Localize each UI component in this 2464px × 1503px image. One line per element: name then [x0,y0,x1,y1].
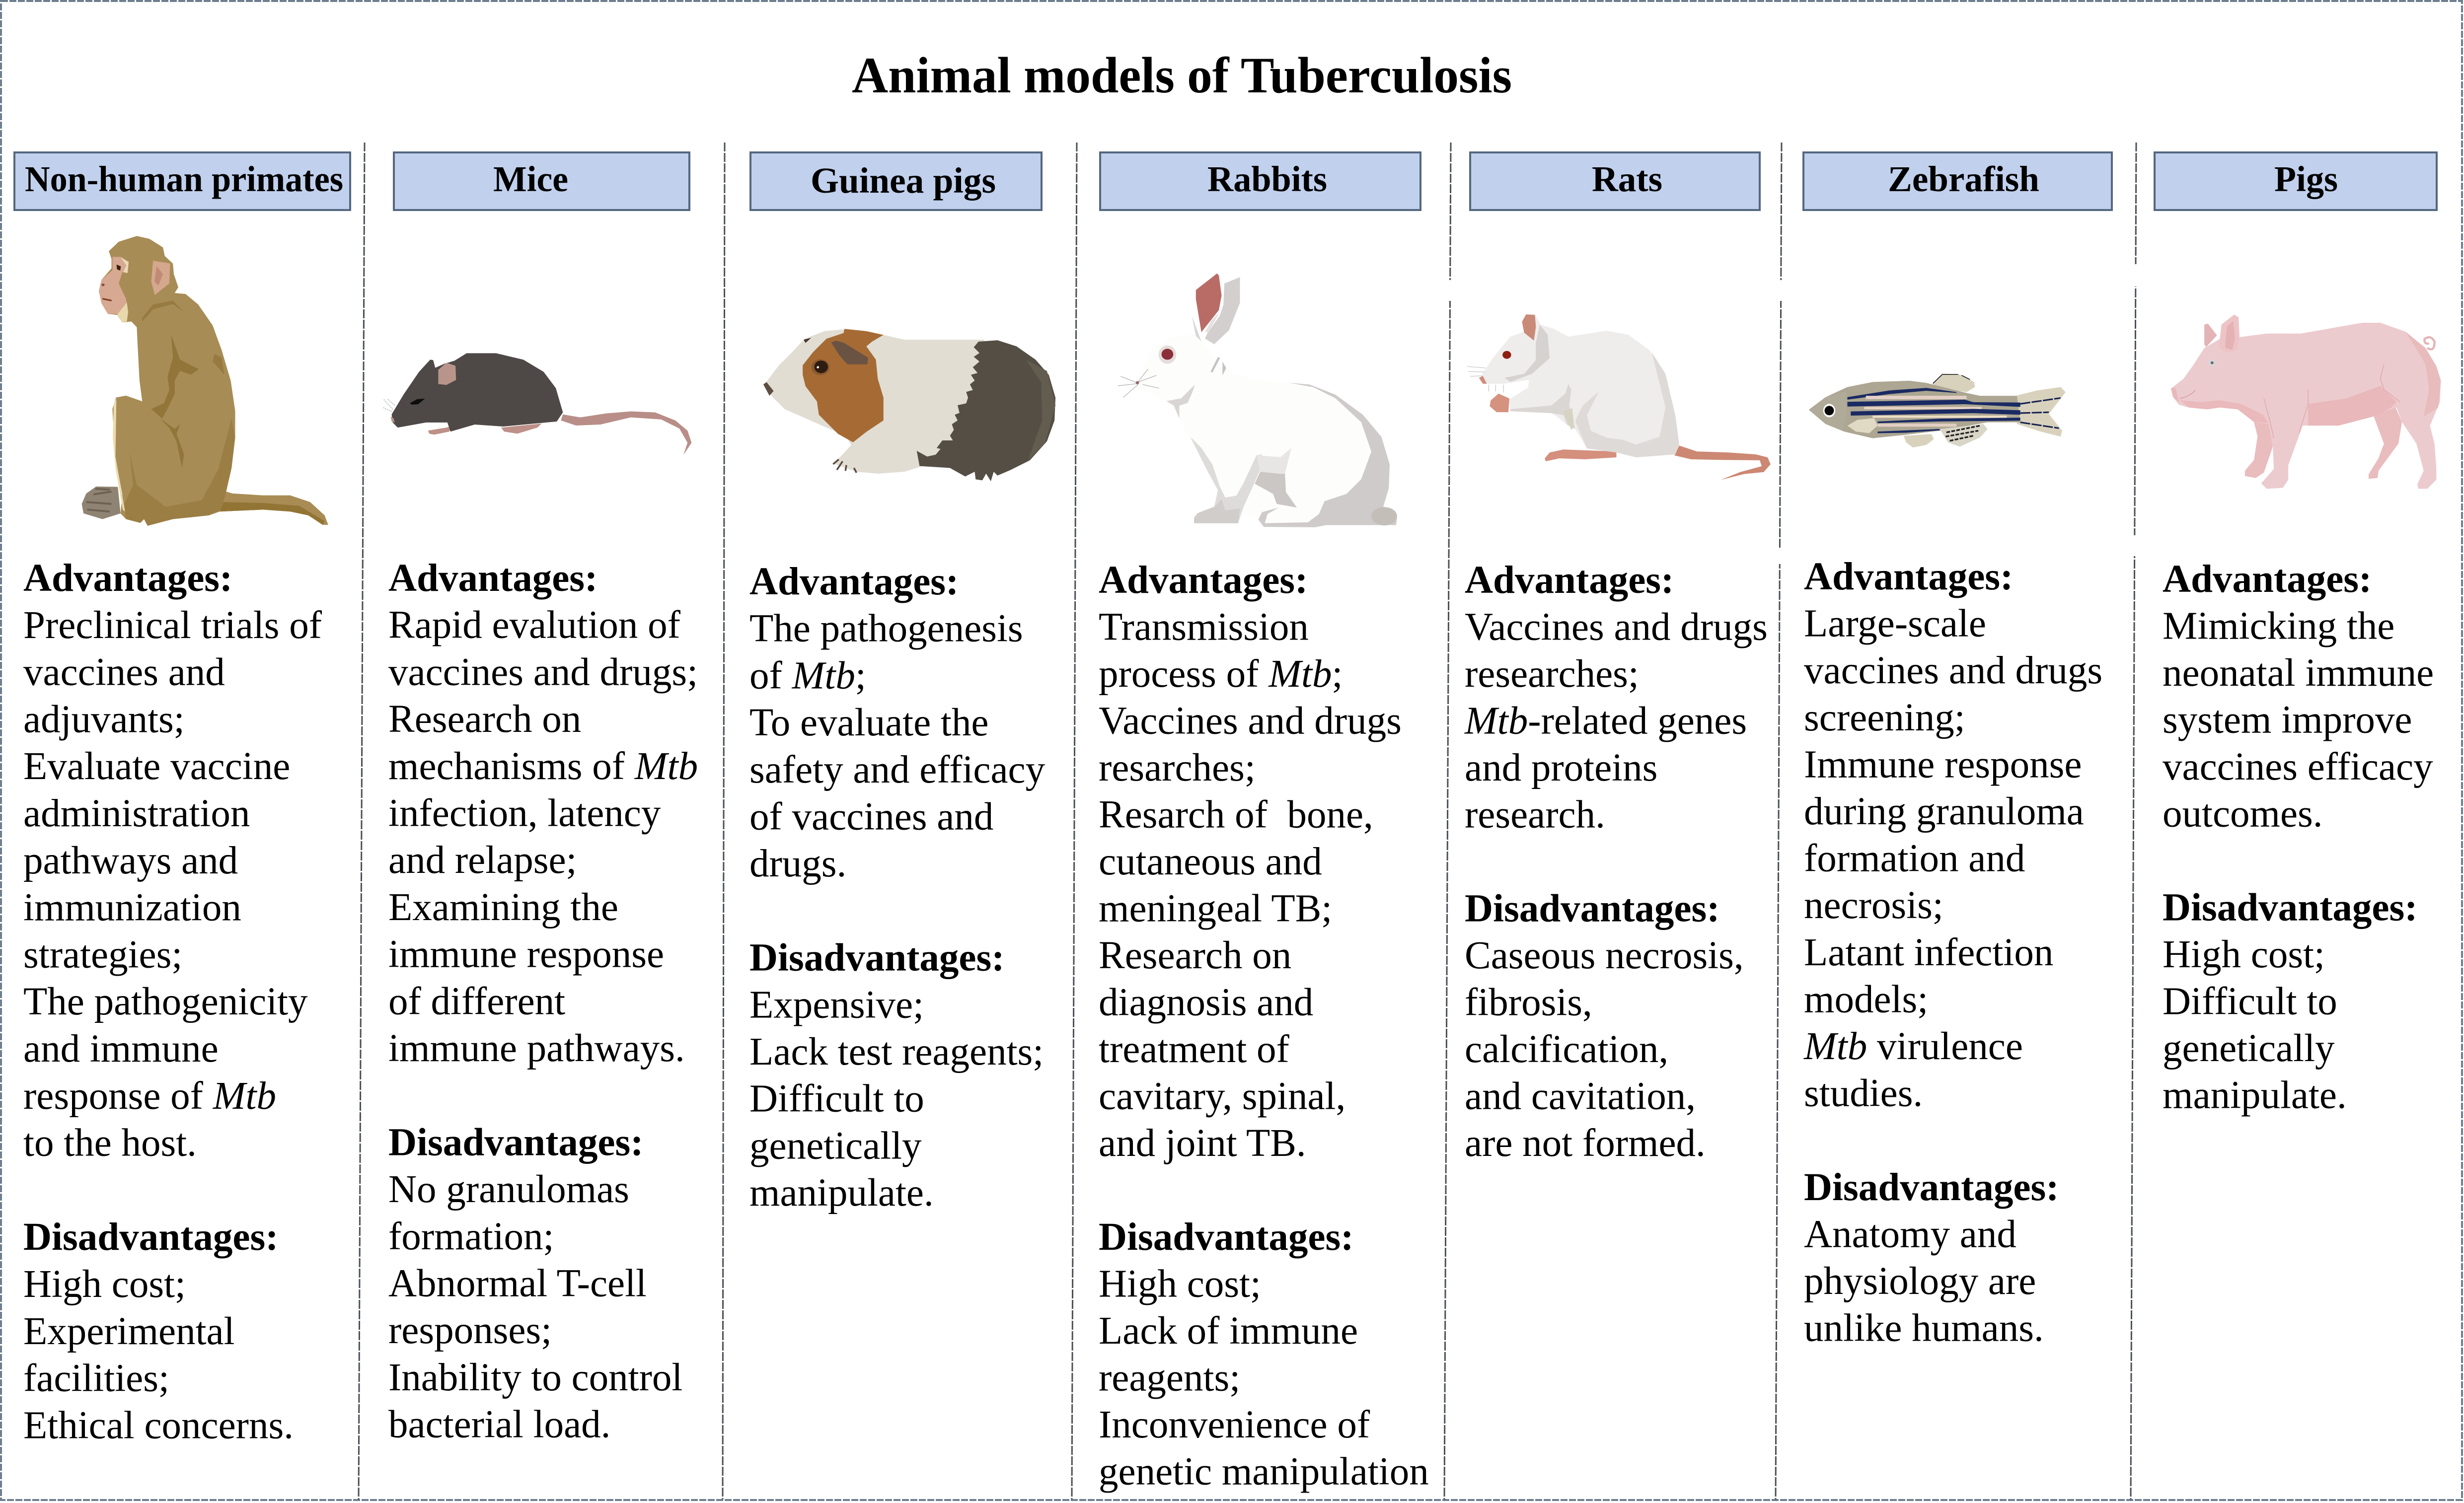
text: advantages and disadvantages: screening; [1804,696,1965,739]
text: advantages and disadvantages: cutaneous and [1099,840,1322,883]
text: advantages and disadvantages: process of Mtb; [1099,652,1343,696]
text: advantages and disadvantages: To evaluate the [749,701,988,744]
panel: Rabbits [1099,152,1429,1494]
text: advantages and disadvantages: unlike humans. [1804,1307,2044,1350]
text: advantages and disadvantages: vaccines efficacy [2163,745,2433,788]
text: advantages and disadvantages: Disadvantages: [1804,1166,2059,1209]
text: advantages and disadvantages: manipulate. [749,1171,934,1215]
text: advantages and disadvantages: resarches; [1099,746,1256,789]
text: advantages and disadvantages: and immune [23,1027,219,1071]
text: advantages and disadvantages: Advantages: [388,557,597,600]
panel: Mice [382,152,698,1446]
text: advantages and disadvantages: Disadvantages: [2163,886,2418,930]
text: advantages and disadvantages: reagents; [1099,1357,1240,1399]
text: advantages and disadvantages: Resarch of bone, [1099,793,1373,836]
heading: Mice [394,152,689,210]
text: advantages and disadvantages: meningeal TB; [1099,887,1332,930]
text: advantages and disadvantages: research. [1465,793,1605,836]
text: advantages and disadvantages: Latant infection [1804,931,2053,974]
text: advantages and disadvantages: diagnosis and [1099,981,1313,1024]
panel: Non-human primates [14,152,350,1447]
text: advantages and disadvantages: genetic manipulation [1099,1450,1429,1494]
icon: pig [2171,315,2441,489]
text: advantages and disadvantages: calcification, [1465,1028,1668,1071]
text: advantages and disadvantages: The pathogenesis [749,607,1023,650]
heading: Non-human primates: Non-human primates [25,159,343,199]
heading: Mice: Mice [493,159,568,199]
text: advantages and disadvantages: and relapse; [388,839,577,882]
text: advantages and disadvantages: drugs. [749,842,846,885]
heading: Zebrafish [1803,152,2112,210]
text: advantages and disadvantages: and cavitation, [1465,1074,1696,1118]
text: advantages and disadvantages: Difficult to [749,1077,924,1121]
text: advantages and disadvantages: necrosis; [1804,884,1943,927]
text: advantages and disadvantages: Caseous necrosis, [1465,934,1744,977]
text: advantages and disadvantages: formation and [1804,837,2025,880]
text: advantages and disadvantages: cavitary, spinal, [1099,1074,1345,1118]
text: advantages and disadvantages: Disadvantages: [388,1121,644,1164]
text: advantages and disadvantages: High cost; [2163,933,2325,976]
text: advantages and disadvantages: models; [1804,978,1928,1021]
text: advantages and disadvantages: Mimicking the [2163,605,2394,647]
text: advantages and disadvantages: Vaccines and drugs [1465,606,1768,648]
text: advantages and disadvantages: Large-scale [1804,602,1986,645]
panel: Rats [1464,152,1771,1165]
text: advantages and disadvantages: manipulate. [2163,1074,2347,1117]
heading: Pigs [2155,152,2437,210]
panel: Zebrafish [1803,152,2112,1350]
text: advantages and disadvantages: Rapid evalution of [388,604,681,647]
text: advantages and disadvantages: researches; [1465,652,1639,696]
text: advantages and disadvantages: Examining the [388,886,618,929]
heading: Guinea pigs [750,152,1042,210]
text: advantages and disadvantages: genetically [2163,1027,2335,1070]
text: advantages and disadvantages: Disadvantages: [1099,1216,1354,1259]
text: advantages and disadvantages: responses; [388,1309,552,1352]
text: advantages and disadvantages: formation; [388,1215,554,1258]
panel: Guinea pigs [749,152,1055,1215]
text: advantages and disadvantages: studies. [1804,1072,1923,1115]
text: advantages and disadvantages: and joint TB. [1099,1122,1306,1165]
title: Animal models of Tuberculosis [852,47,1512,104]
text: advantages and disadvantages: Difficult to [2163,980,2337,1023]
text: advantages and disadvantages: Advantages: [1465,559,1674,602]
text: advantages and disadvantages: Mtb-related genes [1465,699,1747,743]
text: advantages and disadvantages: and proteins [1465,746,1657,789]
text: advantages and disadvantages: adjuvants; [23,698,185,741]
heading: Rabbits [1100,152,1420,210]
icon: macaque monkey [82,236,328,526]
panel: Pigs [2155,152,2441,1117]
heading: Pigs: Pigs [2274,159,2338,199]
text: advantages and disadvantages: are not formed. [1465,1122,1706,1165]
heading: Non-human primates [14,152,350,210]
icon: mouse [382,353,691,455]
text: advantages and disadvantages: Evaluate vaccine [23,745,290,788]
text: advantages and disadvantages: vaccines and [23,651,225,694]
text: advantages and disadvantages: system improve [2163,698,2412,742]
text: advantages and disadvantages: immune pathways. [388,1027,685,1070]
text: advantages and disadvantages: No granulomas [388,1168,629,1211]
text: advantages and disadvantages: Immune response [1804,743,2082,786]
text: advantages and disadvantages: response of Mtb [23,1074,276,1118]
text: advantages and disadvantages: of vaccines and [749,795,993,838]
text: advantages and disadvantages: Disadvantages: [749,936,1005,980]
icon: white rabbit [1118,274,1397,527]
text: advantages and disadvantages: Advantages: [1099,559,1308,602]
text: advantages and disadvantages: Transmission [1099,606,1309,648]
text: advantages and disadvantages: bacterial load. [388,1403,610,1446]
text: advantages and disadvantages: Preclinical trials of [23,604,322,647]
text: advantages and disadvantages: of Mtb; [749,654,866,697]
heading: Rats: Rats [1592,159,1662,199]
text: advantages and disadvantages: outcomes. [2163,792,2323,835]
text: advantages and disadvantages: physiology are [1804,1260,2036,1303]
text: advantages and disadvantages: facilities; [23,1357,169,1400]
icon: white rat [1467,314,1771,480]
text: advantages and disadvantages: mechanisms of Mtb [388,745,698,788]
text: advantages and disadvantages: of different [388,980,565,1023]
heading: Zebrafish: Zebrafish [1888,159,2039,199]
heading: Guinea pigs: Guinea pigs [811,160,996,201]
text: advantages and disadvantages: Expensive; [749,983,924,1026]
text: advantages and disadvantages: infection, latency [388,791,661,835]
icon: guinea pig [763,329,1055,481]
text: advantages and disadvantages: Advantages: [23,557,232,600]
text: advantages and disadvantages: Mtb virulence [1804,1025,2023,1068]
text: advantages and disadvantages: during granuloma [1804,790,2084,833]
text: advantages and disadvantages: to the host. [23,1122,197,1165]
text: advantages and disadvantages: Lack test reagents; [749,1030,1044,1074]
text: advantages and disadvantages: immune response [388,933,664,976]
text: advantages and disadvantages: Research on [388,698,581,741]
text: advantages and disadvantages: neonatal immune [2163,651,2434,695]
text: advantages and disadvantages: administration [23,792,250,835]
text: advantages and disadvantages: genetically [749,1124,922,1167]
text: advantages and disadvantages: fibrosis, [1465,981,1592,1024]
text: advantages and disadvantages: Anatomy and [1804,1213,2016,1256]
text: advantages and disadvantages: Ethical concerns. [23,1404,294,1447]
text: advantages and disadvantages: vaccines and drugs [1804,649,2102,692]
text: advantages and disadvantages: immunization [23,886,241,930]
text: advantages and disadvantages: High cost; [23,1263,186,1306]
text: advantages and disadvantages: Advantages: [2163,558,2372,601]
text: advantages and disadvantages: Experimental [23,1310,235,1353]
heading: Rats [1470,152,1760,210]
icon: zebrafish [1809,374,2066,447]
text: advantages and disadvantages: The pathogenicity [23,980,308,1023]
text: advantages and disadvantages: Inconvenience of [1099,1403,1370,1446]
text: advantages and disadvantages: Disadvantages: [23,1216,279,1259]
text: advantages and disadvantages: strategies; [23,933,182,976]
text: advantages and disadvantages: treatment of [1099,1028,1290,1071]
text: advantages and disadvantages: Abnormal T-cell [388,1262,647,1305]
text: advantages and disadvantages: Advantages: [749,560,959,603]
text: advantages and disadvantages: vaccines and drugs; [388,650,698,694]
text: advantages and disadvantages: pathways and [23,839,238,882]
text: advantages and disadvantages: safety and efficacy [749,748,1045,791]
text: advantages and disadvantages: High cost; [1099,1262,1261,1306]
text: advantages and disadvantages: Disadvantages: [1465,887,1720,930]
text: advantages and disadvantages: Vaccines and drugs [1099,699,1402,743]
text: advantages and disadvantages: Lack of immune [1099,1309,1358,1353]
text: advantages and disadvantages: Advantages: [1804,555,2013,598]
text: advantages and disadvantages: Inability to control [388,1356,682,1399]
heading: Rabbits: Rabbits [1207,159,1327,199]
text: advantages and disadvantages: Research on [1099,934,1291,977]
